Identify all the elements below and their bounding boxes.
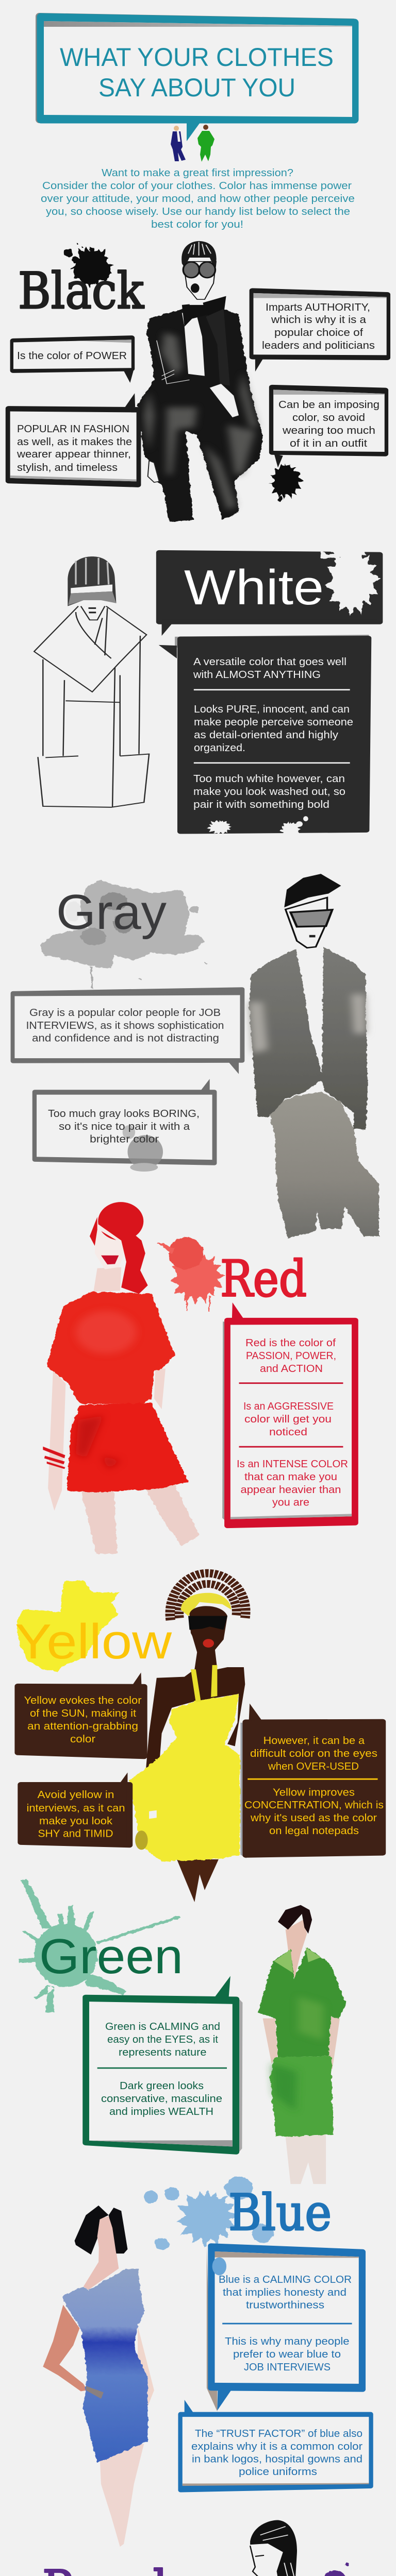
callout: red facts: PASSION, POWER,: [246, 1350, 336, 1362]
section: white: [34, 541, 380, 839]
callout: imposing color: Can be an imposing: [278, 399, 380, 411]
callout: imposing color: [269, 387, 385, 502]
figure: man in green outfit: [258, 1905, 346, 2184]
callout: red facts: noticed: [269, 1427, 307, 1438]
callout: color of power: [13, 338, 134, 383]
intro text: Want to make a great first impression?: [102, 167, 293, 179]
callout: green facts: Dark green looks: [120, 2080, 204, 2092]
section: red: [43, 1202, 355, 1553]
figure: woman in red dress: [43, 1202, 200, 1553]
callout: imparts authority: Imparts AUTHORITY,: [266, 302, 370, 313]
callout: imparts authority: leaders and politicians: [262, 340, 375, 351]
callout: calming color: JOB INTERVIEWS: [244, 2362, 331, 2373]
callout: white facts: [159, 635, 369, 839]
callout: over-used and concentration: why it's used as the color: [250, 1812, 377, 1824]
ink splat: green: [19, 1878, 180, 2012]
callout: imparts authority: popular choice of: [274, 327, 363, 338]
callout: imposing color: color, so avoid: [292, 412, 365, 423]
section: blue: [43, 2177, 371, 2547]
figure: woman in black suit: [138, 241, 263, 522]
callout: green facts: Green is CALMING and: [105, 2021, 220, 2032]
callout: calming color: Blue is a CALMING COLOR: [219, 2274, 352, 2285]
heading: Green: Green: [39, 1929, 183, 1984]
callout: avoid yellow in interviews: [21, 1772, 129, 1845]
ink splat: blue: [143, 2177, 273, 2250]
callout: white facts: make you look washed out, so: [193, 786, 345, 798]
callout: trust factor: The “TRUST FACTOR” of blue also: [195, 2428, 362, 2439]
intro text: best color for you!: [151, 219, 243, 230]
figure: woman in purple gown with splat: [219, 2520, 380, 2576]
intro text: [41, 167, 355, 230]
callout: too much gray: brighter color: [90, 1133, 159, 1145]
callout: green facts: conservative, masculine: [101, 2093, 222, 2105]
callout: white facts: Looks PURE, innocent, and can: [194, 704, 350, 715]
figure: woman in yellow dress: [129, 1573, 245, 1902]
callout: job interviews: [13, 989, 242, 1074]
callout: popular in fashion: POPULAR IN FASHION: [17, 423, 129, 435]
callout: avoid yellow in interviews: interviews, as it can: [27, 1803, 125, 1814]
callout: trust factor: police uniforms: [239, 2466, 317, 2478]
callout: popular in fashion: as well, as it makes the: [17, 436, 132, 448]
callout: evokes the sun: an attention-grabbing: [27, 1721, 138, 1732]
callout: imparts authority: [253, 291, 387, 371]
callout: over-used and concentration: Yellow improves: [273, 1787, 355, 1798]
callout: white facts: make people perceive someone: [194, 717, 353, 728]
callout: popular in fashion: stylish, and timeless: [17, 462, 118, 473]
callout: job interviews: Gray is a popular color people for JOB: [29, 1007, 221, 1019]
title speech bubble: [39, 16, 355, 141]
callout: over-used and concentration: difficult color on the eyes: [250, 1748, 377, 1759]
callout: job interviews: and confidence and is not distracting: [32, 1032, 219, 1044]
callout: over-used and concentration: [240, 1703, 384, 1858]
callout: over-used and concentration: when OVER-USED: [268, 1761, 359, 1772]
callout: red facts: Is an INTENSE COLOR: [237, 1459, 348, 1470]
ink splat behind black heading: [63, 244, 113, 287]
callout: red facts: [222, 1302, 355, 1526]
heading: Gray: Gray: [56, 885, 167, 940]
callout: trust factor: [180, 2400, 371, 2490]
callout: red facts: that can make you: [244, 1471, 337, 1483]
title text: WHAT YOUR CLOTHES: [60, 43, 334, 72]
callout: trust factor: explains why it is a common color: [191, 2441, 362, 2452]
callout: too much gray: Too much gray looks BORING,: [48, 1108, 200, 1120]
section: gray: [13, 874, 379, 1239]
figure: woman in blue dress: [43, 2206, 154, 2547]
intro text: over your attitude, your mood, and how other people perceive: [41, 193, 355, 205]
callout: over-used and concentration: However, it can be a: [263, 1735, 365, 1747]
callout: green facts: represents nature: [119, 2047, 206, 2058]
callout: avoid yellow in interviews: make you look: [39, 1816, 113, 1827]
heading: Black: Black: [18, 262, 144, 320]
callout: calming color: trustworthiness: [246, 2300, 324, 2311]
callout: red facts: and ACTION: [260, 1363, 323, 1375]
callout: popular in fashion: wearer appear thinner,: [16, 449, 131, 460]
callout: too much gray: [35, 1079, 214, 1172]
ink splat: red: [158, 1238, 225, 1311]
ink splat behind gray heading: [40, 880, 207, 988]
section: green: [19, 1878, 346, 2184]
icon: two talking people: [171, 125, 214, 162]
callout: calming color: This is why many people: [225, 2336, 350, 2347]
callout: green facts: and implies WEALTH: [109, 2106, 213, 2117]
callout: imposing color: of it in an outfit: [290, 438, 368, 449]
callout: green facts: [86, 1976, 242, 2153]
callout: evokes the sun: of the SUN, making it: [30, 1708, 136, 1719]
callout: popular in fashion: [9, 393, 138, 485]
intro text: Consider the color of your clothes. Color has immense power: [42, 180, 352, 192]
callout: over-used and concentration: on legal notepads: [269, 1825, 359, 1837]
figure: woman in white coat: [34, 556, 149, 807]
callout: imparts authority: which is why it is a: [271, 314, 367, 326]
section: purple: [17, 2520, 380, 2576]
heading: Blue: Blue: [228, 2184, 332, 2242]
callout: over-used and concentration: CONCENTRATION, which is: [244, 1800, 384, 1811]
callout: white facts: with ALMOST ANYTHING: [193, 669, 321, 681]
figure: man in gray jacket: [249, 874, 379, 1239]
callout: trust factor: in bank logos, hospital gowns and: [192, 2453, 362, 2465]
callout: avoid yellow in interviews: Avoid yellow in: [37, 1789, 114, 1801]
callout: green facts: easy on the EYES, as it: [107, 2034, 218, 2045]
callout: white facts: organized.: [194, 742, 245, 754]
callout: white facts: as detail-oriented and highly: [194, 730, 338, 741]
callout: red facts: you are: [272, 1497, 309, 1509]
callout: evokes the sun: [18, 1672, 144, 1756]
callout: evokes the sun: Yellow evokes the color: [24, 1695, 142, 1706]
callout: imposing color: wearing too much: [282, 425, 375, 436]
callout: job interviews: INTERVIEWS, as it shows sophistication: [26, 1020, 224, 1031]
callout: white facts: pair it with something bold: [193, 799, 329, 810]
callout: red facts: appear heavier than: [240, 1484, 341, 1496]
heading bubble: White: White: [184, 560, 324, 615]
callout: evokes the sun: color: [70, 1734, 95, 1745]
callout: calming color: [207, 2246, 362, 2412]
intro text: you, so choose wisely. Use our handy list below to select the: [46, 206, 350, 217]
section: yellow: [15, 1573, 384, 1902]
callout: red facts: Is an AGGRESSIVE: [243, 1401, 334, 1412]
callout: too much gray: so it's nice to pair it with a: [59, 1121, 190, 1132]
callout: white facts: A versatile color that goes well: [193, 656, 346, 668]
heading: Red: Red: [220, 1250, 307, 1308]
callout: white facts: Too much white however, can: [193, 773, 345, 785]
callout: color of power: Is the color of POWER: [17, 350, 127, 362]
callout: red facts: Red is the color of: [245, 1337, 336, 1349]
heading bubble: White: [159, 541, 380, 636]
callout: calming color: that implies honesty and: [223, 2287, 346, 2298]
section: black: [9, 241, 387, 522]
heading: Yellow: Yellow: [15, 1614, 172, 1669]
callout: red facts: color will get you: [244, 1414, 332, 1425]
callout: calming color: prefer to wear blue to: [233, 2349, 341, 2360]
ink splat: yellow: [16, 1581, 119, 1671]
title speech bubble: SAY ABOUT YOU: [98, 73, 295, 102]
callout: avoid yellow in interviews: SHY and TIMID: [38, 1828, 113, 1839]
